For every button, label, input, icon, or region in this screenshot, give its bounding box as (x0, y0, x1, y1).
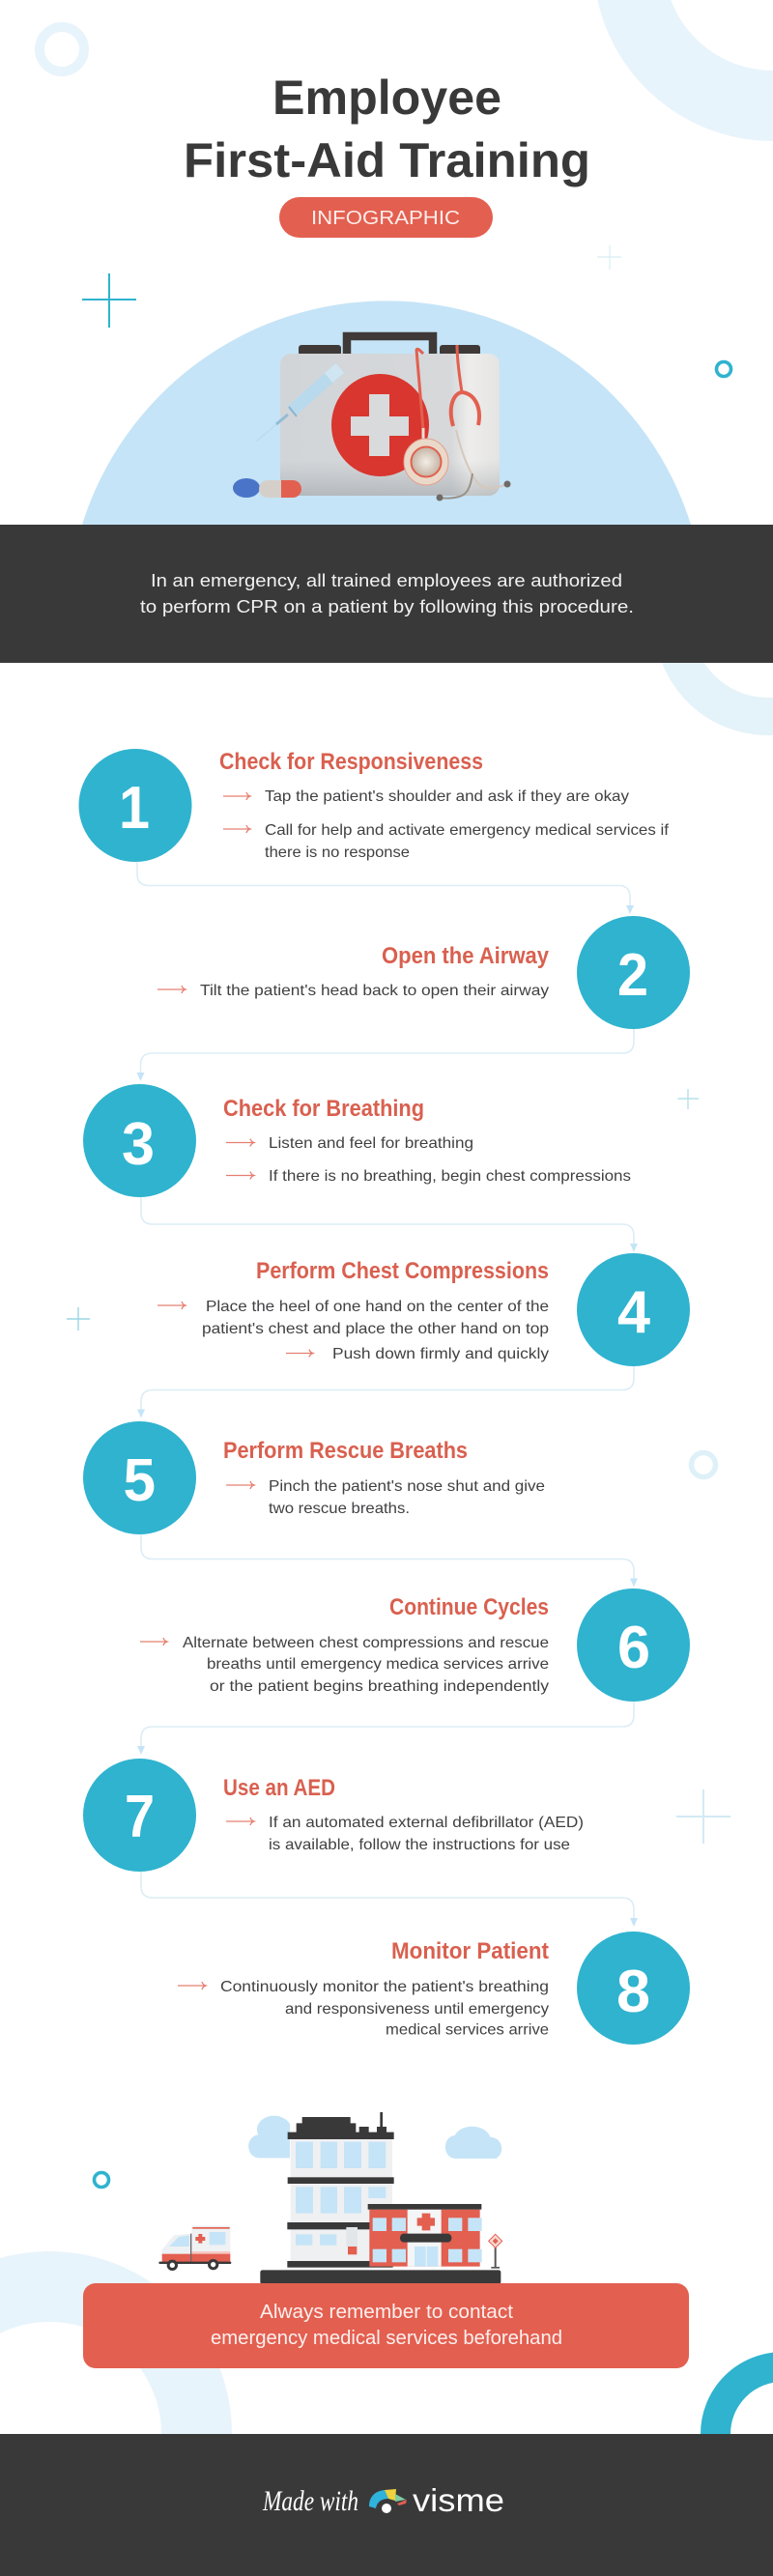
step 3: check for breathing (83, 1084, 631, 1197)
badge: infographic (279, 197, 493, 238)
decor: top right arc (628, 0, 773, 106)
number badge 7 (83, 1759, 196, 1872)
footer: made with visme: visme (413, 2482, 504, 2518)
connector 5 to 6 (141, 1534, 638, 1587)
bullet 1 (157, 1299, 549, 1337)
intro band (0, 525, 773, 663)
intro band: to perform CPR on a patient by following this procedure. (140, 597, 634, 616)
bullet: Continuously monitor the patient's breathing (220, 1979, 549, 1995)
intro band: In an emergency, all trained employees are authorized (151, 571, 622, 590)
step 6: continue cycles (140, 1589, 690, 1702)
bullet: Pinch the patient's nose shut and give (269, 1478, 545, 1495)
pills (233, 478, 301, 498)
decor: top left ring (40, 27, 84, 72)
number badge 1: 1 (119, 775, 150, 842)
bullet: medical services arrive (386, 2021, 549, 2039)
footer: made with visme: Made with (262, 2485, 358, 2517)
number badge 2: 2 (617, 942, 648, 1009)
connector 6 to 7 (137, 1702, 634, 1755)
heading: Perform Rescue Breaths (223, 1438, 468, 1464)
clinic (368, 2204, 482, 2267)
illustration: first aid kit (233, 336, 510, 501)
bullet 1: Place the heel of one hand on the center of the (206, 1299, 549, 1315)
kit body (280, 354, 500, 496)
clouds (248, 2116, 501, 2159)
decor: plus near step 3 (678, 1089, 699, 1109)
connector 4 to 5 (137, 1366, 634, 1418)
decor: plus near step 7 (676, 1789, 730, 1844)
stethoscope (404, 345, 510, 501)
kit handle (347, 336, 433, 356)
bullet 2 (223, 822, 670, 861)
bullet (178, 1979, 549, 2039)
connector 7 to 8 (141, 1872, 638, 1927)
decor: teal plus (82, 273, 136, 328)
number badge 3 (83, 1084, 196, 1197)
bullet (140, 1635, 549, 1695)
footer: made with visme (262, 2482, 504, 2518)
number badge 3: 3 (122, 1111, 155, 1178)
bullet: breaths until emergency medica services arrive (207, 1656, 549, 1673)
number badge 8: 8 (616, 1959, 650, 2025)
bullet 1: patient's chest and place the other hand on top (202, 1321, 549, 1337)
bullet 2: Push down firmly and quickly (332, 1346, 549, 1362)
decor: faint plus (597, 245, 621, 270)
title (184, 71, 590, 187)
callout (83, 2283, 689, 2368)
illustration: hospital scene (158, 2112, 502, 2284)
heading: Perform Chest Compressions (256, 1258, 549, 1284)
connector 1 to 2 (137, 862, 634, 914)
number badge 6: 6 (617, 1615, 650, 1681)
bullet: or the patient begins breathing independently (210, 1678, 549, 1695)
decor: small teal ring (95, 2172, 108, 2188)
number badge 4: 4 (617, 1279, 651, 1346)
number badge 8 (577, 1932, 690, 2045)
callout: Always remember to contact (260, 2302, 513, 2323)
bullet 2: If there is no breathing, begin chest compressions (269, 1168, 631, 1185)
number badge 4 (577, 1253, 690, 1366)
icon: visme logo (369, 2489, 407, 2513)
decor: teal ring (717, 361, 730, 377)
heading: Check for Breathing (223, 1096, 424, 1122)
bullet 2: there is no response (265, 844, 410, 861)
bullet: Tilt the patient's head back to open their airway (200, 983, 549, 999)
number badge 5: 5 (124, 1447, 156, 1514)
step 4: perform chest compressions (157, 1253, 690, 1366)
title: First-Aid Training (184, 133, 590, 187)
decor: bottom right teal arc (715, 2367, 773, 2501)
decor: arc under intro band (662, 663, 773, 735)
bullet: If an automated external defibrillator (AED) (269, 1815, 584, 1831)
number badge 5 (83, 1421, 196, 1534)
step 7: use an aed (83, 1759, 584, 1872)
dome backdrop (82, 301, 691, 525)
footer band (0, 2434, 773, 2576)
syringe (256, 368, 340, 442)
heading: Check for Responsiveness (219, 749, 483, 775)
step 1: check for responsiveness (79, 749, 670, 862)
bullet: is available, follow the instructions for use (269, 1837, 570, 1853)
heading: Open the Airway (382, 943, 550, 969)
bullet (226, 1815, 584, 1853)
tower (287, 2112, 394, 2268)
number badge 1 (79, 749, 191, 862)
step 2: open the airway (157, 916, 690, 1029)
heading: Monitor Patient (391, 1938, 549, 1964)
decor: ring near step 5 (692, 1453, 715, 1476)
ambulance (158, 2225, 231, 2271)
kit clasps (299, 345, 480, 356)
bullet: two rescue breaths. (269, 1501, 410, 1517)
number badge 2 (577, 916, 690, 1029)
bullet 1: Listen and feel for breathing (269, 1135, 473, 1152)
bullet 2: Call for help and activate emergency medical services if (265, 822, 670, 839)
sign (489, 2234, 502, 2269)
number badge 6 (577, 1589, 690, 1702)
heading: Use an AED (223, 1775, 335, 1801)
bullet: and responsiveness until emergency (285, 2001, 549, 2018)
connector 3 to 4 (141, 1197, 638, 1252)
badge: infographic: INFOGRAPHIC (311, 208, 460, 229)
decor: plus near step 4 (67, 1307, 90, 1331)
bullet: Alternate between chest compressions and rescue (183, 1635, 549, 1651)
step 5: perform rescue breaths (83, 1421, 545, 1534)
bullet (226, 1478, 545, 1517)
title: Employee (272, 71, 501, 125)
connector 2 to 3 (137, 1029, 634, 1081)
ground (260, 2270, 501, 2284)
callout: emergency medical services beforehand (211, 2328, 562, 2349)
red emblem (331, 374, 429, 476)
heading: Continue Cycles (389, 1594, 549, 1620)
decor: bottom left arc (0, 2286, 197, 2576)
step 8: monitor patient (178, 1932, 690, 2045)
number badge 7: 7 (125, 1784, 155, 1850)
bullet 1: Tap the patient's shoulder and ask if they are okay (265, 788, 629, 805)
